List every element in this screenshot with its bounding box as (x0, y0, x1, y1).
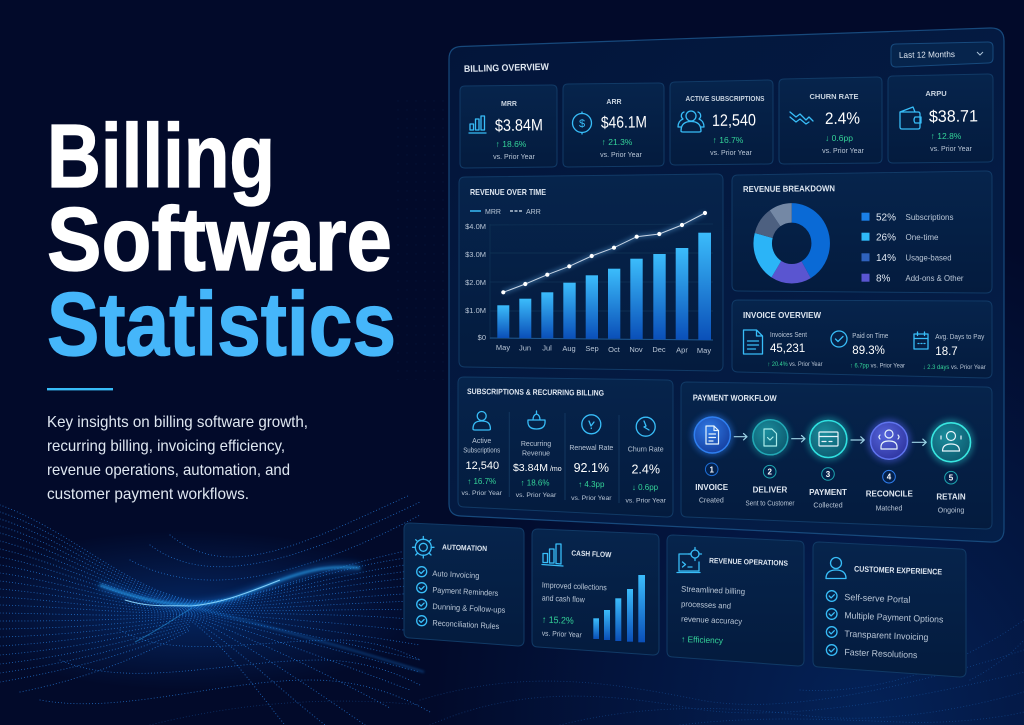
card: cash flow: CASH FLOW (571, 549, 612, 559)
card: automation: AUTOMATION (442, 543, 487, 553)
card: cash flow: and cash flow (542, 594, 585, 604)
donut legend: 8% (876, 274, 891, 284)
intro text (47, 414, 308, 503)
donut legend: Add-ons & Other (906, 273, 964, 283)
step 1: invoice (691, 414, 733, 504)
icon: wallet (900, 107, 921, 129)
metric: average days to pay: 18.7 (935, 346, 958, 358)
chart legend: MRR (485, 209, 501, 216)
icon: bars (542, 544, 563, 566)
bar and line chart: $3.0M (465, 250, 486, 259)
metric: renewal rate: ↑ 4.3pp (578, 480, 605, 489)
KPI card: active subscriptions: vs. Prior Year (710, 150, 752, 157)
dropdown: last 12 months: Last 12 Months (899, 49, 955, 60)
panel: invoice overview (732, 300, 992, 378)
checklist (826, 591, 944, 660)
step 3: payment (806, 417, 850, 510)
KPI card: ARR: $ (579, 118, 585, 130)
donut legend (862, 212, 964, 284)
KPI card: ARR (563, 83, 664, 167)
card: revenue operations (667, 535, 804, 666)
intro text: recurring billing, invoicing efficiency, (47, 438, 285, 455)
step 1: invoice: INVOICE (695, 483, 729, 492)
KPI card: active subscriptions: ↑ 16.7% (713, 135, 744, 145)
metric: recurring revenue: Recurring (521, 441, 551, 448)
KPI card: MRR: vs. Prior Year (493, 154, 535, 161)
metric: active subscriptions: Subscriptions (463, 448, 501, 455)
checklist: Self-serve Portal (844, 592, 911, 605)
icon: gear (412, 536, 434, 558)
step 2: deliver (746, 416, 795, 507)
accent rule (47, 388, 113, 390)
card: cash flow: ↑ 15.2% (542, 615, 574, 627)
icon: dollar circle (572, 112, 592, 134)
intro text: revenue operations, automation, and (47, 462, 290, 479)
step 4: reconcile: RECONCILE (866, 490, 914, 499)
heading: revenue over time: REVENUE OVER TIME (470, 187, 546, 197)
KPI card: active subscriptions: 12,540 (712, 111, 756, 130)
card: revenue operations: ↑ Efficiency (681, 634, 724, 645)
step 1: invoice: Created (699, 497, 724, 504)
metric: churn rate (625, 417, 667, 504)
step 5: retain (928, 419, 974, 515)
KPI card: ARR: ↑ 21.3% (602, 137, 633, 147)
card: cash flow: vs. Prior Year (542, 629, 582, 639)
title: Billing (47, 107, 275, 207)
metric: churn rate: Churn Rate (628, 447, 664, 454)
metric: recurring revenue: vs. Prior Year (516, 492, 557, 499)
KPI card: MRR: $3.84M (495, 116, 543, 135)
bar and line chart: $0 (478, 333, 486, 342)
icon: users (678, 111, 704, 132)
KPI card: MRR (460, 85, 557, 168)
step 4: reconcile (866, 419, 914, 512)
metric: renewal rate (569, 415, 613, 502)
KPI card: churn rate: vs. Prior Year (822, 148, 864, 155)
panel: billing dashboard (449, 28, 1004, 542)
bar and line chart: May (496, 343, 510, 352)
icon: bars (469, 116, 486, 133)
KPI card: ARPU: ↑ 12.8% (931, 131, 962, 141)
bar and line chart: $2.0M (465, 278, 486, 287)
dropdown: last 12 months (891, 42, 993, 67)
bar and line chart: Sep (585, 344, 599, 353)
metric: recurring revenue: $3.84M /mo (513, 462, 562, 474)
KPI card: ARR: $46.1M (601, 113, 647, 132)
KPI card: ARR: vs. Prior Year (600, 152, 642, 159)
KPI card: ARPU (888, 74, 993, 163)
heading: subscriptions: SUBSCRIPTIONS & RECURRING BILLING (467, 387, 604, 398)
donut legend: 14% (876, 253, 896, 264)
metric: recurring revenue: ↑ 18.6% (521, 479, 549, 488)
step 5: retain: RETAIN (936, 492, 966, 501)
bar and line chart: Aug (562, 344, 576, 353)
checklist (417, 567, 506, 631)
KPI card: MRR: ↑ 18.6% (496, 139, 527, 149)
checklist: Payment Reminders (432, 586, 499, 598)
donut legend: Usage-based (906, 252, 952, 262)
donut legend: Subscriptions (906, 212, 954, 222)
metric: renewal rate: vs. Prior Year (571, 495, 612, 502)
bar and line chart: Nov (629, 345, 643, 354)
heading: payment workflow: PAYMENT WORKFLOW (693, 393, 778, 403)
metric: active subscriptions: ↑ 16.7% (467, 477, 496, 486)
panel: revenue over time (459, 174, 723, 371)
bar and line chart: Jul (542, 344, 552, 352)
metric: paid on time (831, 331, 906, 370)
heading: invoice overview: INVOICE OVERVIEW (743, 310, 822, 320)
title: Statistics (47, 275, 396, 375)
chart legend: ARR (526, 209, 541, 216)
card: revenue operations: processes and (681, 600, 731, 611)
donut legend: 26% (876, 232, 896, 244)
KPI card: MRR: MRR (501, 101, 517, 108)
metric: recurring revenue (513, 411, 562, 499)
mini bar chart (593, 575, 645, 642)
intro text: Key insights on billing software growth, (47, 414, 308, 431)
metric: active subscriptions: vs. Prior Year (461, 490, 503, 497)
checklist: Multiple Payment Options (844, 610, 944, 625)
metric: churn rate: 2.4% (631, 462, 660, 476)
intro text: customer payment workflows. (47, 486, 249, 503)
metric: invoices sent: 45,231 (770, 343, 805, 355)
arrow (792, 436, 805, 442)
card: cash flow: Improved collections (542, 581, 607, 592)
bar and line chart (465, 211, 713, 355)
metric: paid on time: ↑ 6.7pp vs. Prior Year (850, 362, 906, 370)
arrow (851, 437, 864, 443)
step 4: reconcile: Matched (876, 505, 903, 512)
step 2: deliver: 2 (767, 468, 772, 477)
KPI card: active subscriptions (670, 80, 773, 165)
title: Software (47, 190, 392, 290)
card: revenue operations: Streamlined billing (681, 585, 745, 596)
metric: renewal rate: Renewal Rate (569, 445, 613, 452)
step 4: reconcile: 4 (887, 473, 892, 482)
step 2: deliver: DELIVER (753, 485, 788, 494)
metric: recurring revenue: Revenue (522, 451, 550, 458)
metric: active subscriptions (461, 412, 503, 497)
card: customer experience (813, 542, 966, 677)
bar and line chart: $1.0M (465, 306, 486, 315)
KPI card: churn rate: CHURN RATE (809, 92, 859, 101)
checklist: Dunning & Follow-ups (432, 602, 506, 615)
metric: invoices sent: Invoices Sent (770, 330, 807, 339)
bar and line chart: $4.0M (465, 222, 486, 231)
heading: revenue breakdown: REVENUE BREAKDOWN (743, 183, 835, 194)
step 5: retain: Ongoing (938, 508, 964, 515)
icon: person (826, 558, 846, 578)
KPI card: ARPU: vs. Prior Year (930, 146, 972, 153)
card: customer experience: CUSTOMER EXPERIENCE (854, 565, 943, 577)
metric: active subscriptions: Active (472, 438, 491, 445)
donut chart (763, 213, 821, 274)
step 3: payment: 3 (826, 470, 831, 479)
chart legend (470, 209, 541, 216)
metric: paid on time: 89.3% (852, 345, 885, 357)
bar and line chart: May (697, 346, 711, 355)
metric: average days to pay: Avg. Days to Pay (935, 332, 985, 341)
metric: invoices sent (744, 330, 823, 368)
panel: subscriptions and recurring billing (458, 377, 673, 517)
metric: churn rate: ↓ 0.6pp (632, 483, 659, 492)
metric: renewal rate: 92.1% (574, 461, 609, 475)
donut legend: One-time (906, 232, 939, 242)
bar and line chart: Apr (676, 346, 688, 354)
card: automation (404, 523, 524, 646)
card: revenue operations: REVENUE OPERATIONS (709, 556, 788, 568)
card: revenue operations: revenue accuracy (681, 615, 742, 626)
icon: falling trend (790, 112, 813, 124)
KPI card: churn rate: 2.4% (825, 110, 860, 128)
step 3: payment: Collected (813, 503, 843, 510)
arrow (912, 439, 926, 446)
bar and line chart: Dec (652, 345, 666, 354)
checklist: Reconciliation Rules (432, 619, 500, 631)
metric: invoices sent: ↑ 20.4% vs. Prior Year (768, 361, 823, 368)
metric: paid on time: Paid on Time (852, 331, 888, 340)
KPI card: ARPU: $38.71 (929, 107, 978, 126)
icon: operations screen and gear (677, 548, 702, 572)
metric: average days to pay (914, 332, 986, 371)
panel: revenue breakdown (732, 171, 992, 293)
particle wave (0, 495, 1024, 725)
checklist: Transparent Invoicing (844, 629, 929, 642)
bar and line chart: Oct (608, 345, 621, 354)
KPI card: active subscriptions: ACTIVE SUBSCRIPTIONS (686, 94, 764, 103)
step 3: payment: PAYMENT (809, 488, 847, 497)
checklist: Faster Resolutions (844, 647, 918, 660)
bar and line chart: Jun (519, 344, 531, 352)
metric: active subscriptions: 12,540 (465, 460, 499, 472)
KPI card: churn rate: ↓ 0.6pp (825, 133, 853, 143)
metric: average days to pay: ↓ 2.3 days vs. Prior Year (923, 364, 986, 371)
KPI card: ARPU: ARPU (925, 89, 947, 98)
KPI card: churn rate (779, 77, 882, 164)
checklist: Auto Invoicing (432, 569, 480, 580)
metric: churn rate: vs. Prior Year (625, 497, 667, 504)
donut legend: 52% (876, 212, 896, 224)
step 1: invoice: 1 (709, 465, 714, 474)
step 2: deliver: Sent to Customer (746, 500, 795, 507)
heading: billing overview: BILLING OVERVIEW (464, 62, 549, 75)
panel: payment workflow (681, 382, 992, 529)
KPI card: ARR: ARR (606, 99, 622, 106)
card: cash flow (532, 529, 659, 655)
step 5: retain: 5 (949, 474, 954, 483)
title (47, 107, 396, 375)
arrow (734, 434, 747, 440)
